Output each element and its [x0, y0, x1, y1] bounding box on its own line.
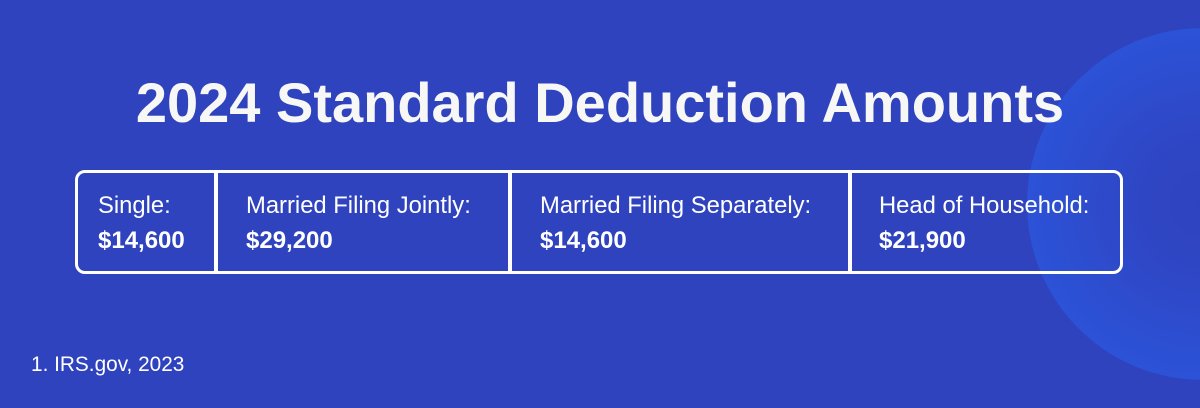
cell: head of household — [879, 192, 1089, 254]
cell: married filing separately — [540, 192, 811, 254]
decorative circle — [1027, 28, 1200, 380]
cell: married filing jointly — [246, 192, 471, 254]
label: Married Filing Separately: — [540, 192, 811, 219]
amount: $14,600 — [98, 227, 185, 254]
amount: $29,200 — [246, 227, 333, 254]
title: 2024 Standard Deduction Amounts — [136, 71, 1064, 134]
amount: $21,900 — [879, 227, 966, 254]
amount: $14,600 — [540, 227, 627, 254]
divider — [508, 173, 512, 271]
label: Head of Household: — [879, 192, 1089, 219]
footnote: 1. IRS.gov, 2023 — [31, 353, 184, 376]
label: Married Filing Jointly: — [246, 192, 471, 219]
divider — [848, 173, 852, 271]
divider — [214, 173, 218, 271]
label: Single: — [98, 192, 171, 219]
table of deduction amounts — [75, 170, 1123, 274]
cell: single — [98, 192, 185, 254]
